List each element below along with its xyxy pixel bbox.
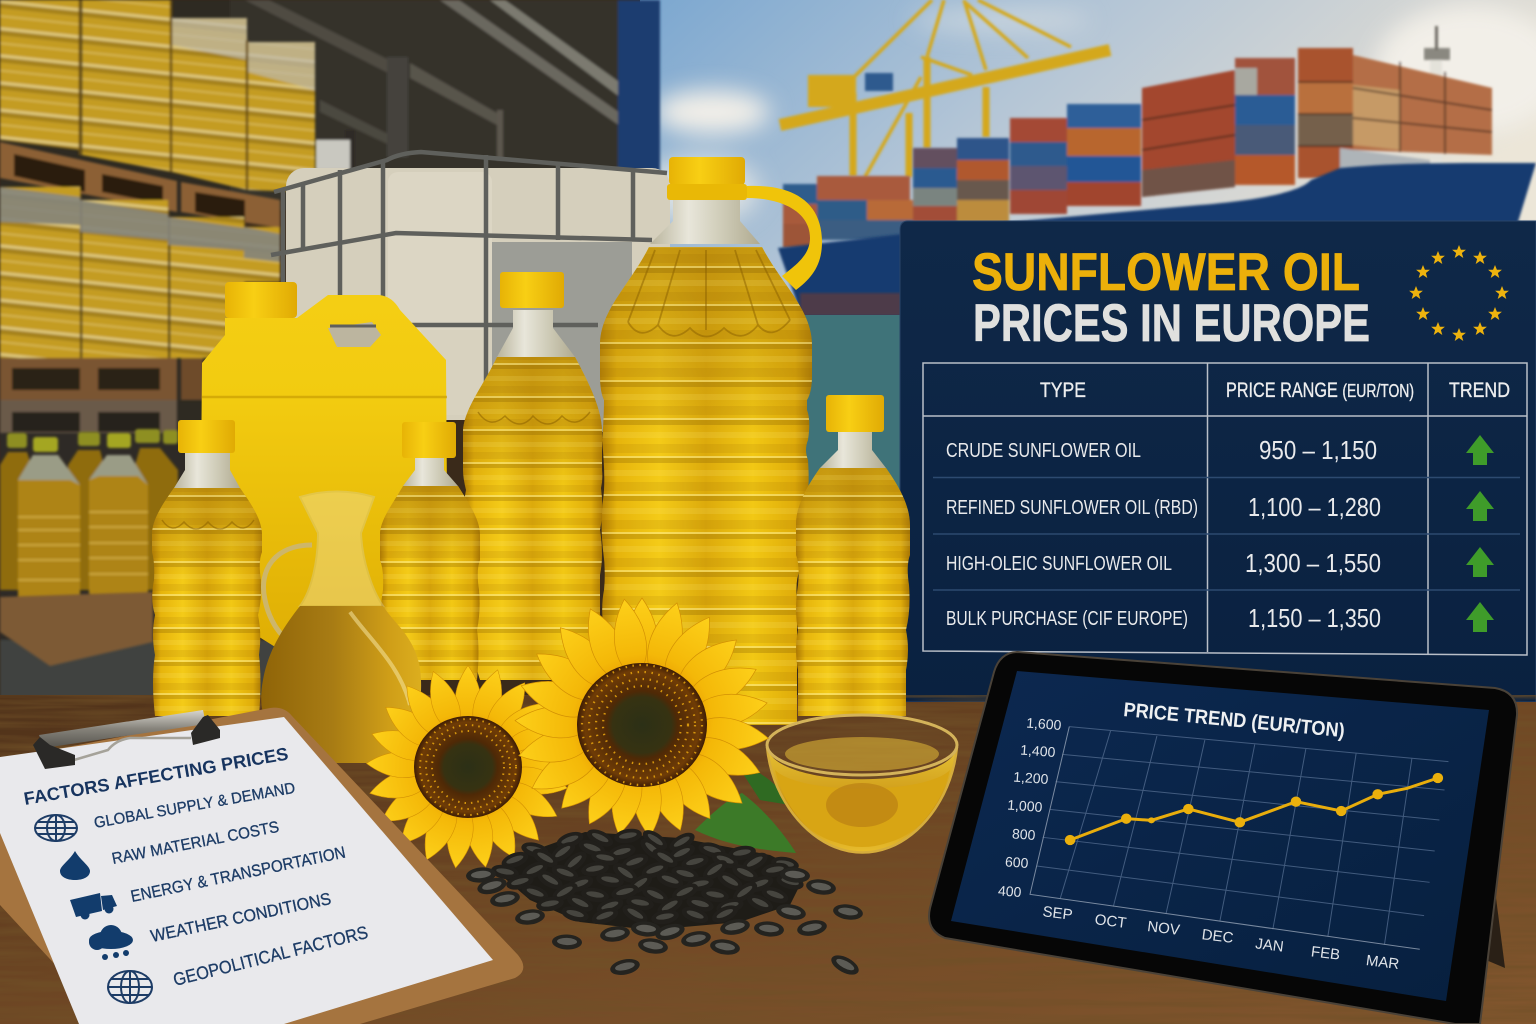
row: high-oleic sunflower oil: HIGH-OLEIC SUNFLOWER OIL — [946, 553, 1172, 575]
pallets of packed oil bottles — [0, 0, 315, 433]
right small bottle — [796, 395, 910, 716]
y-axis labels: 400 — [997, 882, 1022, 900]
wooden table surface — [0, 695, 1536, 1024]
background: sky with clouds — [640, 0, 1536, 320]
factor: raw material costs: RAW MATERIAL COSTS — [111, 819, 281, 868]
row: high-oleic sunflower oil — [946, 547, 1494, 578]
ship lower hull — [800, 293, 910, 316]
factor: geopolitical factors: GEOPOLITICAL FACTORS — [171, 922, 370, 990]
factor: energy and transportation: ENERGY & TRANSPORTATION — [129, 844, 347, 906]
table header — [1040, 379, 1510, 402]
x-axis labels: FEB — [1310, 943, 1341, 964]
icon: EU stars — [1409, 245, 1509, 341]
chart title: PRICE TREND (EUR/TON) — [1123, 699, 1346, 742]
row: high-oleic sunflower oil: 1,300 – 1,550 — [1245, 548, 1381, 578]
paper sheet — [0, 717, 493, 1024]
x-axis labels: NOV — [1146, 918, 1181, 939]
table grid — [923, 363, 1527, 655]
clipboard board — [0, 708, 523, 1024]
tablet stand — [1486, 890, 1505, 968]
x-axis labels: SEP — [1042, 903, 1073, 924]
water — [790, 315, 920, 490]
y-axis labels: 1,000 — [1007, 797, 1043, 815]
title: PRICES IN EUROPE — [973, 294, 1370, 353]
row: bulk purchase — [946, 602, 1494, 633]
factor: weather conditions — [89, 889, 333, 960]
table header: TYPE — [1040, 379, 1086, 402]
tablet screen — [951, 671, 1489, 1001]
title: SUNFLOWER OIL — [972, 243, 1360, 302]
x-axis labels — [1042, 903, 1400, 973]
x-axis labels: DEC — [1201, 926, 1234, 947]
data line with markers — [1065, 773, 1443, 845]
factor: energy and transportation — [70, 844, 347, 920]
tablet: price trend chart — [929, 652, 1517, 1024]
ship mast — [1424, 26, 1450, 170]
row: bulk purchase: 1,150 – 1,350 — [1248, 603, 1381, 633]
row: crude sunflower oil: 950 – 1,150 — [1259, 435, 1377, 465]
tablet body — [929, 652, 1517, 1024]
x-axis labels: MAR — [1365, 952, 1400, 973]
warehouse floor — [0, 430, 290, 700]
row: refined sunflower oil: REFINED SUNFLOWER OIL (RBD) — [946, 497, 1198, 519]
panel background — [900, 221, 1536, 702]
row: crude sunflower oil: CRUDE SUNFLOWER OIL — [946, 440, 1141, 462]
y-axis labels — [997, 715, 1062, 900]
table header: PRICE RANGE (EUR/TON) — [1226, 379, 1414, 402]
icon: globe — [108, 971, 152, 1003]
row: crude sunflower oil — [946, 435, 1494, 465]
row: refined sunflower oil — [946, 491, 1494, 522]
gridlines and axes — [1030, 727, 1448, 949]
table header: TREND — [1449, 379, 1510, 402]
icon: rain cloud — [89, 925, 133, 960]
glass carafe of oil — [261, 492, 421, 763]
sunflower: small — [366, 665, 570, 869]
glass bowl of oil — [767, 715, 957, 852]
ship hull — [778, 163, 1536, 320]
x-axis labels: JAN — [1254, 935, 1285, 956]
y-axis labels: 1,600 — [1026, 715, 1062, 733]
factor: global supply and demand: GLOBAL SUPPLY & DEMAND — [93, 780, 297, 832]
medium bottle — [463, 272, 602, 680]
clipboard: factors affecting prices — [0, 708, 523, 1024]
y-axis labels: 800 — [1011, 825, 1036, 843]
metal clip — [33, 710, 220, 769]
wooden pallet under bottles — [0, 592, 153, 666]
icon: globe — [35, 815, 77, 841]
back leaf — [736, 763, 790, 805]
line chart — [997, 699, 1448, 973]
pile of sunflower seeds — [465, 826, 864, 979]
large handled bottle — [600, 157, 822, 725]
left small bottle — [152, 420, 262, 716]
factor: geopolitical factors — [108, 922, 370, 1003]
y-axis labels: 1,400 — [1020, 742, 1056, 760]
y-axis labels: 1,200 — [1013, 769, 1049, 787]
panel: sunflower oil prices — [900, 221, 1536, 702]
price table — [923, 363, 1527, 655]
row: bulk purchase: BULK PURCHASE (CIF EUROPE) — [946, 608, 1188, 630]
IBC tote tank in metal cage — [271, 152, 670, 440]
sunflower: large — [515, 597, 770, 838]
container stacks on ship — [783, 48, 1492, 248]
front leaf — [695, 793, 796, 853]
y-axis labels: 600 — [1004, 853, 1029, 871]
port crane — [780, 0, 1110, 177]
factor: raw material costs — [60, 819, 281, 880]
yellow jerrycan — [200, 282, 448, 650]
rows of small bottles in the background — [0, 429, 178, 608]
warehouse structure — [0, 0, 660, 440]
icon: truck — [70, 893, 117, 920]
x-axis labels: OCT — [1094, 911, 1127, 932]
heading: FACTORS AFFECTING PRICES — [22, 744, 290, 809]
mid small bottle — [380, 422, 480, 680]
title — [972, 243, 1370, 353]
factor: weather conditions: WEATHER CONDITIONS — [149, 889, 333, 946]
row: refined sunflower oil: 1,100 – 1,280 — [1248, 492, 1381, 522]
icon: water drop — [60, 851, 90, 880]
factor: global supply and demand — [35, 780, 297, 841]
